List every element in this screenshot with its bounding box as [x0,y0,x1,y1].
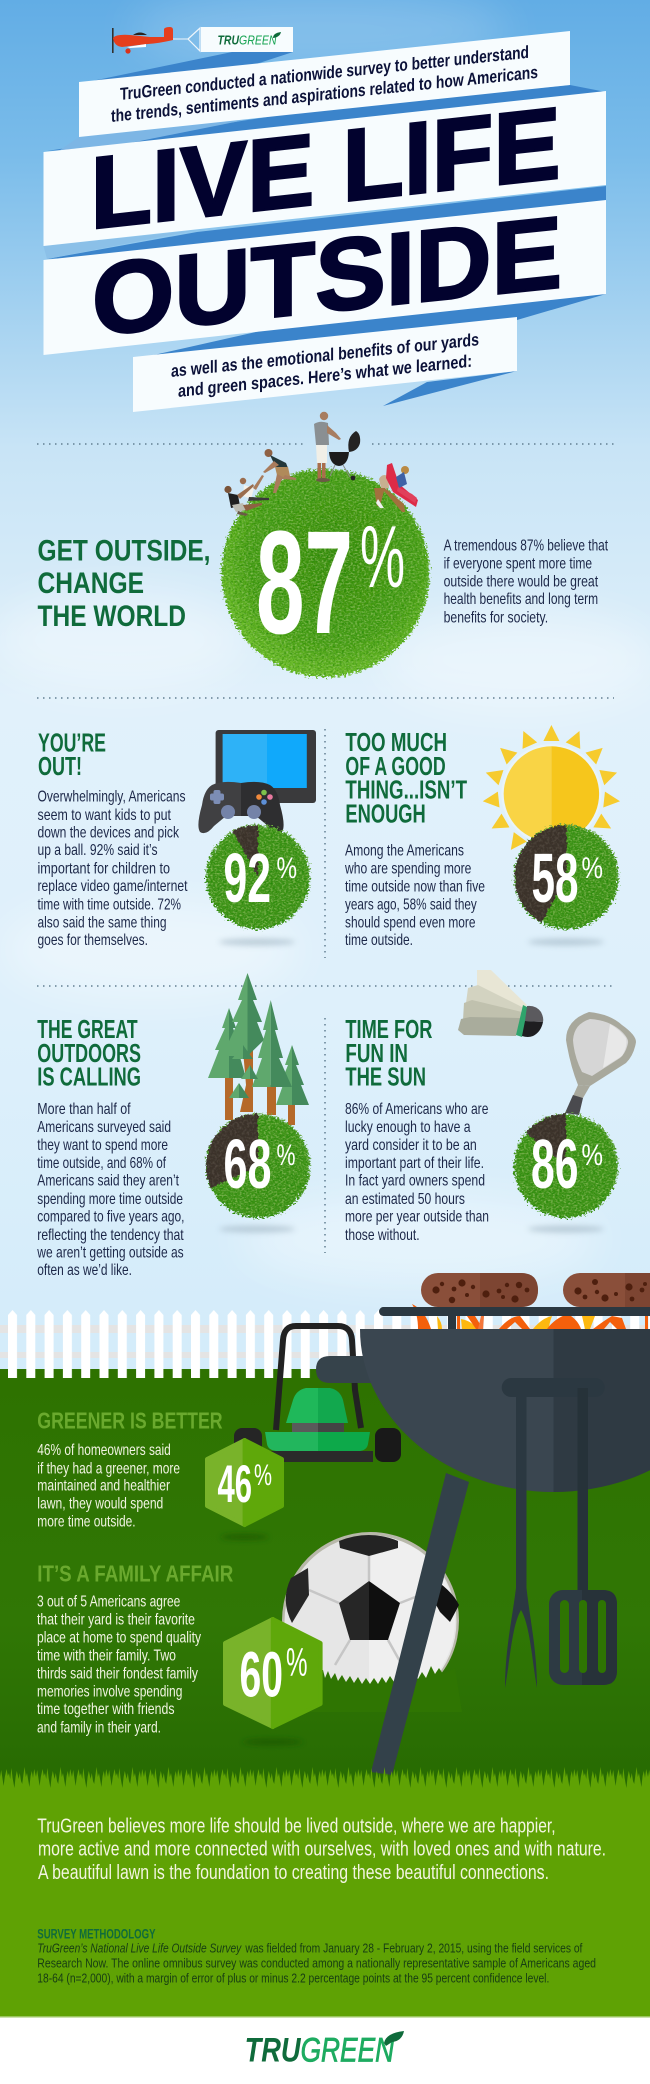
body text: memories involve spending [37,1684,182,1701]
body text: up a ball. 92% said it’s [38,842,158,859]
heading [345,729,467,828]
text: get outside body: health benefits and long term [444,591,598,608]
shadow under 46 hexagon [221,1534,269,1540]
banner: intro: TruGreen conducted a nationwide survey to better understand [120,42,529,104]
body text [37,1594,201,1736]
closing statement [37,1816,606,1884]
body text: who are spending more [344,860,471,877]
body text: down the devices and pick [38,825,180,842]
body text: More than half of [37,1101,131,1118]
footer logo: GREEN [301,2032,394,2070]
grill fork [505,1588,537,1688]
shadow under 68 [219,1226,295,1232]
grass ball 92 percent [206,825,310,929]
text: get outside body: if everyone spent more time [444,555,592,572]
heading: get outside: GET OUTSIDE, [38,535,210,568]
sky background [0,0,650,1400]
body text: goes for themselves. [38,932,148,949]
flames [412,1304,648,1329]
hexagon 46 percent: % [254,1459,272,1492]
banner: title outside: OUTSIDE [92,194,562,357]
banner: title live life: LIVE LIFE [90,85,560,251]
woman in deck chair [374,463,418,512]
body text: reflecting the tendency that [37,1227,184,1244]
body text: time with time outside. 72% [38,896,181,913]
grass ball 58 percent [515,825,619,929]
body text: Among the Americans [345,843,464,860]
body text: more time outside. [37,1514,136,1531]
body text: those without. [345,1227,420,1244]
footer logo [245,2031,404,2070]
icon: sun [482,725,621,855]
heading: IT’S A FAMILY AFFAIR [37,1561,234,1587]
icon: shuttlecock [458,970,543,1037]
heading: IS CALLING [37,1064,141,1092]
methodology text [37,1941,596,1986]
logo flag [201,27,293,52]
shadow under 60 hexagon [243,1739,303,1745]
body text: replace video game/internet [38,878,188,895]
grass ball 68 percent: 68 [224,1125,272,1203]
methodology heading: SURVEY METHODOLOGY [37,1926,155,1941]
body text: compared to five years ago, [37,1209,184,1226]
shadow under 58 [528,938,604,946]
heading: THING...ISN’T [345,777,467,805]
heading: THE GREAT [37,1016,138,1044]
grass ball 92 percent: % [276,852,297,885]
text: get outside body: benefits for society. [444,610,548,627]
icon: burger patties [421,1273,650,1307]
footer logo: TRU [245,2032,302,2070]
sun rays [482,725,621,855]
heading [37,1016,141,1092]
body text: seem to want kids to put [38,807,171,824]
plane [112,27,200,54]
text: get outside body: outside there would be great [444,574,599,591]
heading: OF A GOOD [345,753,446,781]
picket fence [0,1310,650,1378]
grill grate [379,1307,650,1330]
grass ball 86 percent: 86 [531,1125,578,1203]
body text: also said the same thing [38,914,166,931]
people on planet [224,412,418,516]
body text [344,843,485,949]
flag logo text: GREEN [239,32,277,48]
body text [345,1101,489,1244]
grass ball 86 percent [514,1114,618,1218]
heading: ENOUGH [345,800,426,828]
body text: if they had a greener, more [37,1460,180,1477]
icon: trees [208,973,309,1125]
icon: racket [565,1012,636,1115]
ball patches [286,1535,459,1640]
grill back leg [371,1473,469,1775]
small trees [229,1045,258,1098]
lawn ground [0,1369,650,1791]
section: family affair [37,1561,234,1736]
heading: get outside [38,535,210,633]
section: great outdoors [37,1016,184,1279]
man pulling [263,449,296,493]
grass ball 58 percent: % [582,852,603,885]
heading: GREENER IS BETTER [37,1407,223,1433]
body text: time with their family. Two [37,1647,176,1664]
body text: Americans surveyed said [37,1119,171,1136]
tree middle [222,973,264,1056]
man falling [224,484,262,516]
shadow under 92 [219,938,295,946]
banner: intro [79,31,570,137]
body text: they want to spend more [37,1137,168,1154]
heading: get outside: CHANGE [38,567,144,600]
kettle grill small [329,431,360,480]
hexagon 60 percent [225,1619,321,1727]
survey methodology [37,1926,596,1986]
icon: lawn mower [234,1326,401,1462]
grass planet 87 percent: % [360,507,405,606]
body text: and family in their yard. [37,1719,161,1736]
body text: lucky enough to have a [345,1119,471,1136]
section: greener is better [37,1407,223,1531]
tree right tall [252,1000,292,1087]
tree trunks [225,1050,295,1125]
body text: 46% of homeowners said [37,1442,171,1459]
grass ball 68 percent [206,1114,310,1218]
patty right [563,1273,650,1307]
body text: place at home to spend quality [37,1630,201,1647]
body text: we aren’t getting outside as [37,1244,184,1261]
plane with logo flag [112,27,293,54]
methodology text: TruGreen’s National Live Life Outside Survey [37,1941,242,1956]
heading [345,1016,432,1092]
clouds [0,0,650,1285]
grass planet 87 percent [222,469,430,677]
body text: important for children to [38,860,170,877]
grass planet 87 percent: 87 [256,501,353,665]
heading: get outside: THE WORLD [38,600,186,633]
body text: Americans said they aren’t [37,1173,179,1190]
body text: In fact yard owners spend [345,1173,485,1190]
grass ball 68 percent: % [276,1139,296,1172]
grass ball 92 percent: 92 [224,839,271,917]
foreground grass [0,1765,650,2018]
heading: YOU’RE [38,730,106,758]
kid [240,475,269,501]
griller [314,412,341,482]
section: time for fun in the sun [345,1016,489,1244]
body text: thirds said their fondest family [37,1666,198,1683]
heading: TOO MUCH [345,729,447,757]
body text: often as we’d like. [37,1262,132,1279]
shadow under 86 [528,1226,604,1232]
flag logo text [218,32,281,48]
body text: time outside, and 68% of [37,1155,166,1172]
body text [37,1101,184,1279]
hexagon 46 percent: 46 [218,1455,252,1514]
tree far right [276,1045,309,1105]
banner folds [44,52,606,406]
flag logo text: TRU [218,32,239,48]
body text: an estimated 50 hours [345,1191,465,1208]
body text: important part of their life. [345,1155,484,1172]
banner: intro continued [133,317,517,412]
body text: time outside. [345,932,413,949]
icon: kettle grill [316,1307,650,1775]
banner: intro continued: and green spaces. Here’s what we learned: [178,351,472,401]
body text: more per year outside than [345,1209,489,1226]
mower handle [276,1326,361,1430]
body text: time outside now than five [345,879,485,896]
patty left [421,1273,538,1307]
grass ball 58 percent: 58 [532,839,578,917]
icon: soccer ball [282,1532,459,1709]
heading [38,730,106,781]
grass in front of ball [300,1666,462,1712]
heading: OUTDOORS [37,1040,141,1068]
body text: time together with friends [37,1701,174,1718]
body text: maintained and healthier [37,1478,171,1495]
banner: intro continued: as well as the emotional benefits of our yards [171,329,479,381]
text: get outside body [444,538,609,627]
section: too much of a good thing [344,729,485,949]
hexagon 60 percent: 60 [240,1639,283,1711]
mower deck [265,1432,373,1462]
grill bowl [360,1329,650,1492]
grass ball 86 percent: % [582,1139,603,1172]
icon: game controller [198,782,284,833]
mower engine [286,1388,348,1433]
body text: Overwhelmingly, Americans [38,789,186,806]
heading: TIME FOR [345,1016,432,1044]
heading: OUT! [38,753,82,781]
grill handle [316,1356,372,1383]
mower wheels [234,1428,401,1462]
body text: yard consider it to be an [345,1137,477,1154]
footer band [0,2018,650,2084]
body text: years ago, 58% said they [345,896,477,913]
body text: spending more time outside [37,1191,183,1208]
ball seams [309,1552,428,1665]
body text: should spend even more [345,914,476,931]
section: you're out [38,730,188,949]
body text [37,1442,180,1531]
heading: FUN IN [345,1040,408,1068]
icon: tablet [216,730,316,803]
body text: lawn, they would spend [37,1495,163,1512]
hexagon 60 percent: % [286,1641,308,1685]
tree left [208,1008,246,1078]
banner: intro: the trends, sentiments and aspirations related to how Americans [111,62,538,126]
body text: 86% of Americans who are [345,1101,488,1118]
hexagon 46 percent [207,1440,282,1525]
tool rack [502,1378,605,1593]
grill spatula [549,1590,617,1685]
body text: that their yard is their favorite [37,1611,195,1628]
heading: THE SUN [345,1064,426,1092]
body text [38,789,188,949]
body text: 3 out of 5 Americans agree [37,1594,180,1611]
